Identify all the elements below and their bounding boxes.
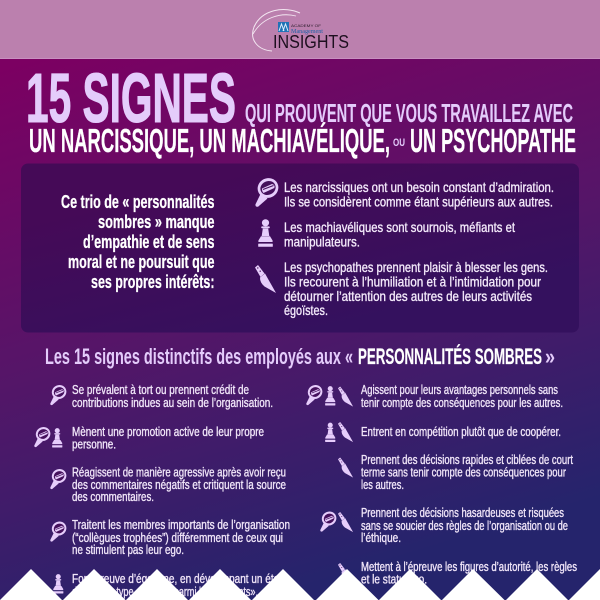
sign 4: [50, 518, 290, 557]
psychopaths description: [284, 260, 548, 318]
sign 1: Se prévalent à tort ou prennent crédit de: [72, 383, 249, 397]
sign 2: Mènent une promotion active de leur propre: [72, 425, 264, 439]
sign 3: des commentaires négatifs et critiquent la source: [72, 478, 286, 492]
panel intro text: ses propres intérêts:: [91, 271, 214, 292]
logo: Academy of Management Insights: INSIGHTS: [273, 31, 349, 52]
machiavellians description: Les machiavéliques sont sournois, méfiants et: [284, 220, 515, 235]
narcissists description: Les narcissiques ont un besoin constant d’admiration.: [284, 180, 554, 195]
sign 2: [34, 425, 264, 452]
section heading: Les 15 signes distinctifs des employés aux «: [45, 344, 353, 369]
machiavellians description: [284, 220, 515, 250]
panel intro text: [61, 191, 214, 292]
psychopaths description: détourner l’attention des autres de leurs activités: [284, 289, 532, 304]
narcissists description: [284, 180, 554, 210]
sign 1: [50, 383, 273, 410]
sign 10: et le statu quo.: [361, 572, 427, 586]
sign 9: l’éthique.: [361, 531, 401, 545]
sign 4: ne stimulent pas leur ego.: [72, 543, 184, 557]
sign 5: [53, 572, 282, 599]
title: OU: [393, 137, 405, 149]
psychopaths description: Les psychopathes prennent plaisir à blesser les gens.: [284, 260, 548, 275]
panel intro text: Ce trio de « personnalités: [61, 191, 214, 212]
sign 2: personne.: [72, 438, 116, 452]
section heading: »: [545, 344, 555, 369]
logo: Academy of Management Insights: [253, 10, 349, 52]
title: [26, 59, 576, 159]
torn-edge white zigzag: [0, 569, 600, 600]
sign 5: d’esprit du type « choisis parmi les gagnants».: [72, 585, 258, 599]
psychopaths description: Ils recourent à l’humiliation et à l’intimidation pour: [284, 274, 541, 290]
sign 8: [338, 453, 573, 492]
sign 9: [320, 506, 568, 545]
psychopaths description: égoïstes.: [284, 303, 328, 318]
sign 8: les autres.: [361, 478, 404, 492]
sign 7: [325, 422, 561, 442]
sign 3: Réagissent de manière agressive après avoir reçu: [72, 466, 286, 480]
sign 4: (“collègues trophées”) différemment de ceux qui: [72, 531, 283, 545]
sign 6: [306, 383, 563, 410]
logo: Academy of Management Insights: ACADEMY OF: [291, 24, 322, 28]
panel intro text: d’empathie et de sens: [83, 231, 214, 252]
title: 15 SIGNES: [26, 59, 236, 137]
sign 3: [50, 466, 286, 504]
sign 10: [338, 560, 577, 586]
machiavellians description: manipulateurs.: [284, 234, 360, 250]
icon: knife: [255, 265, 276, 293]
panel intro text: sombres » manque: [98, 211, 214, 232]
panel intro text: moral et ne poursuit que: [68, 251, 214, 272]
logo: Academy of Management Insights: Management: [291, 28, 323, 35]
sign 1: contributions indues au sein de l’organisation.: [72, 396, 273, 410]
sign 5: Font preuve d’égoïsme, en développant un état: [72, 572, 282, 586]
sign 3: des commentaires.: [72, 490, 154, 504]
header band: [0, 0, 600, 58]
sign 4: Traitent les membres importants de l’organisation: [72, 518, 290, 532]
icon: magnifying glass: [254, 175, 282, 207]
panel: dark personalities definition: [21, 164, 579, 332]
icon: chess pawn: [258, 219, 273, 247]
